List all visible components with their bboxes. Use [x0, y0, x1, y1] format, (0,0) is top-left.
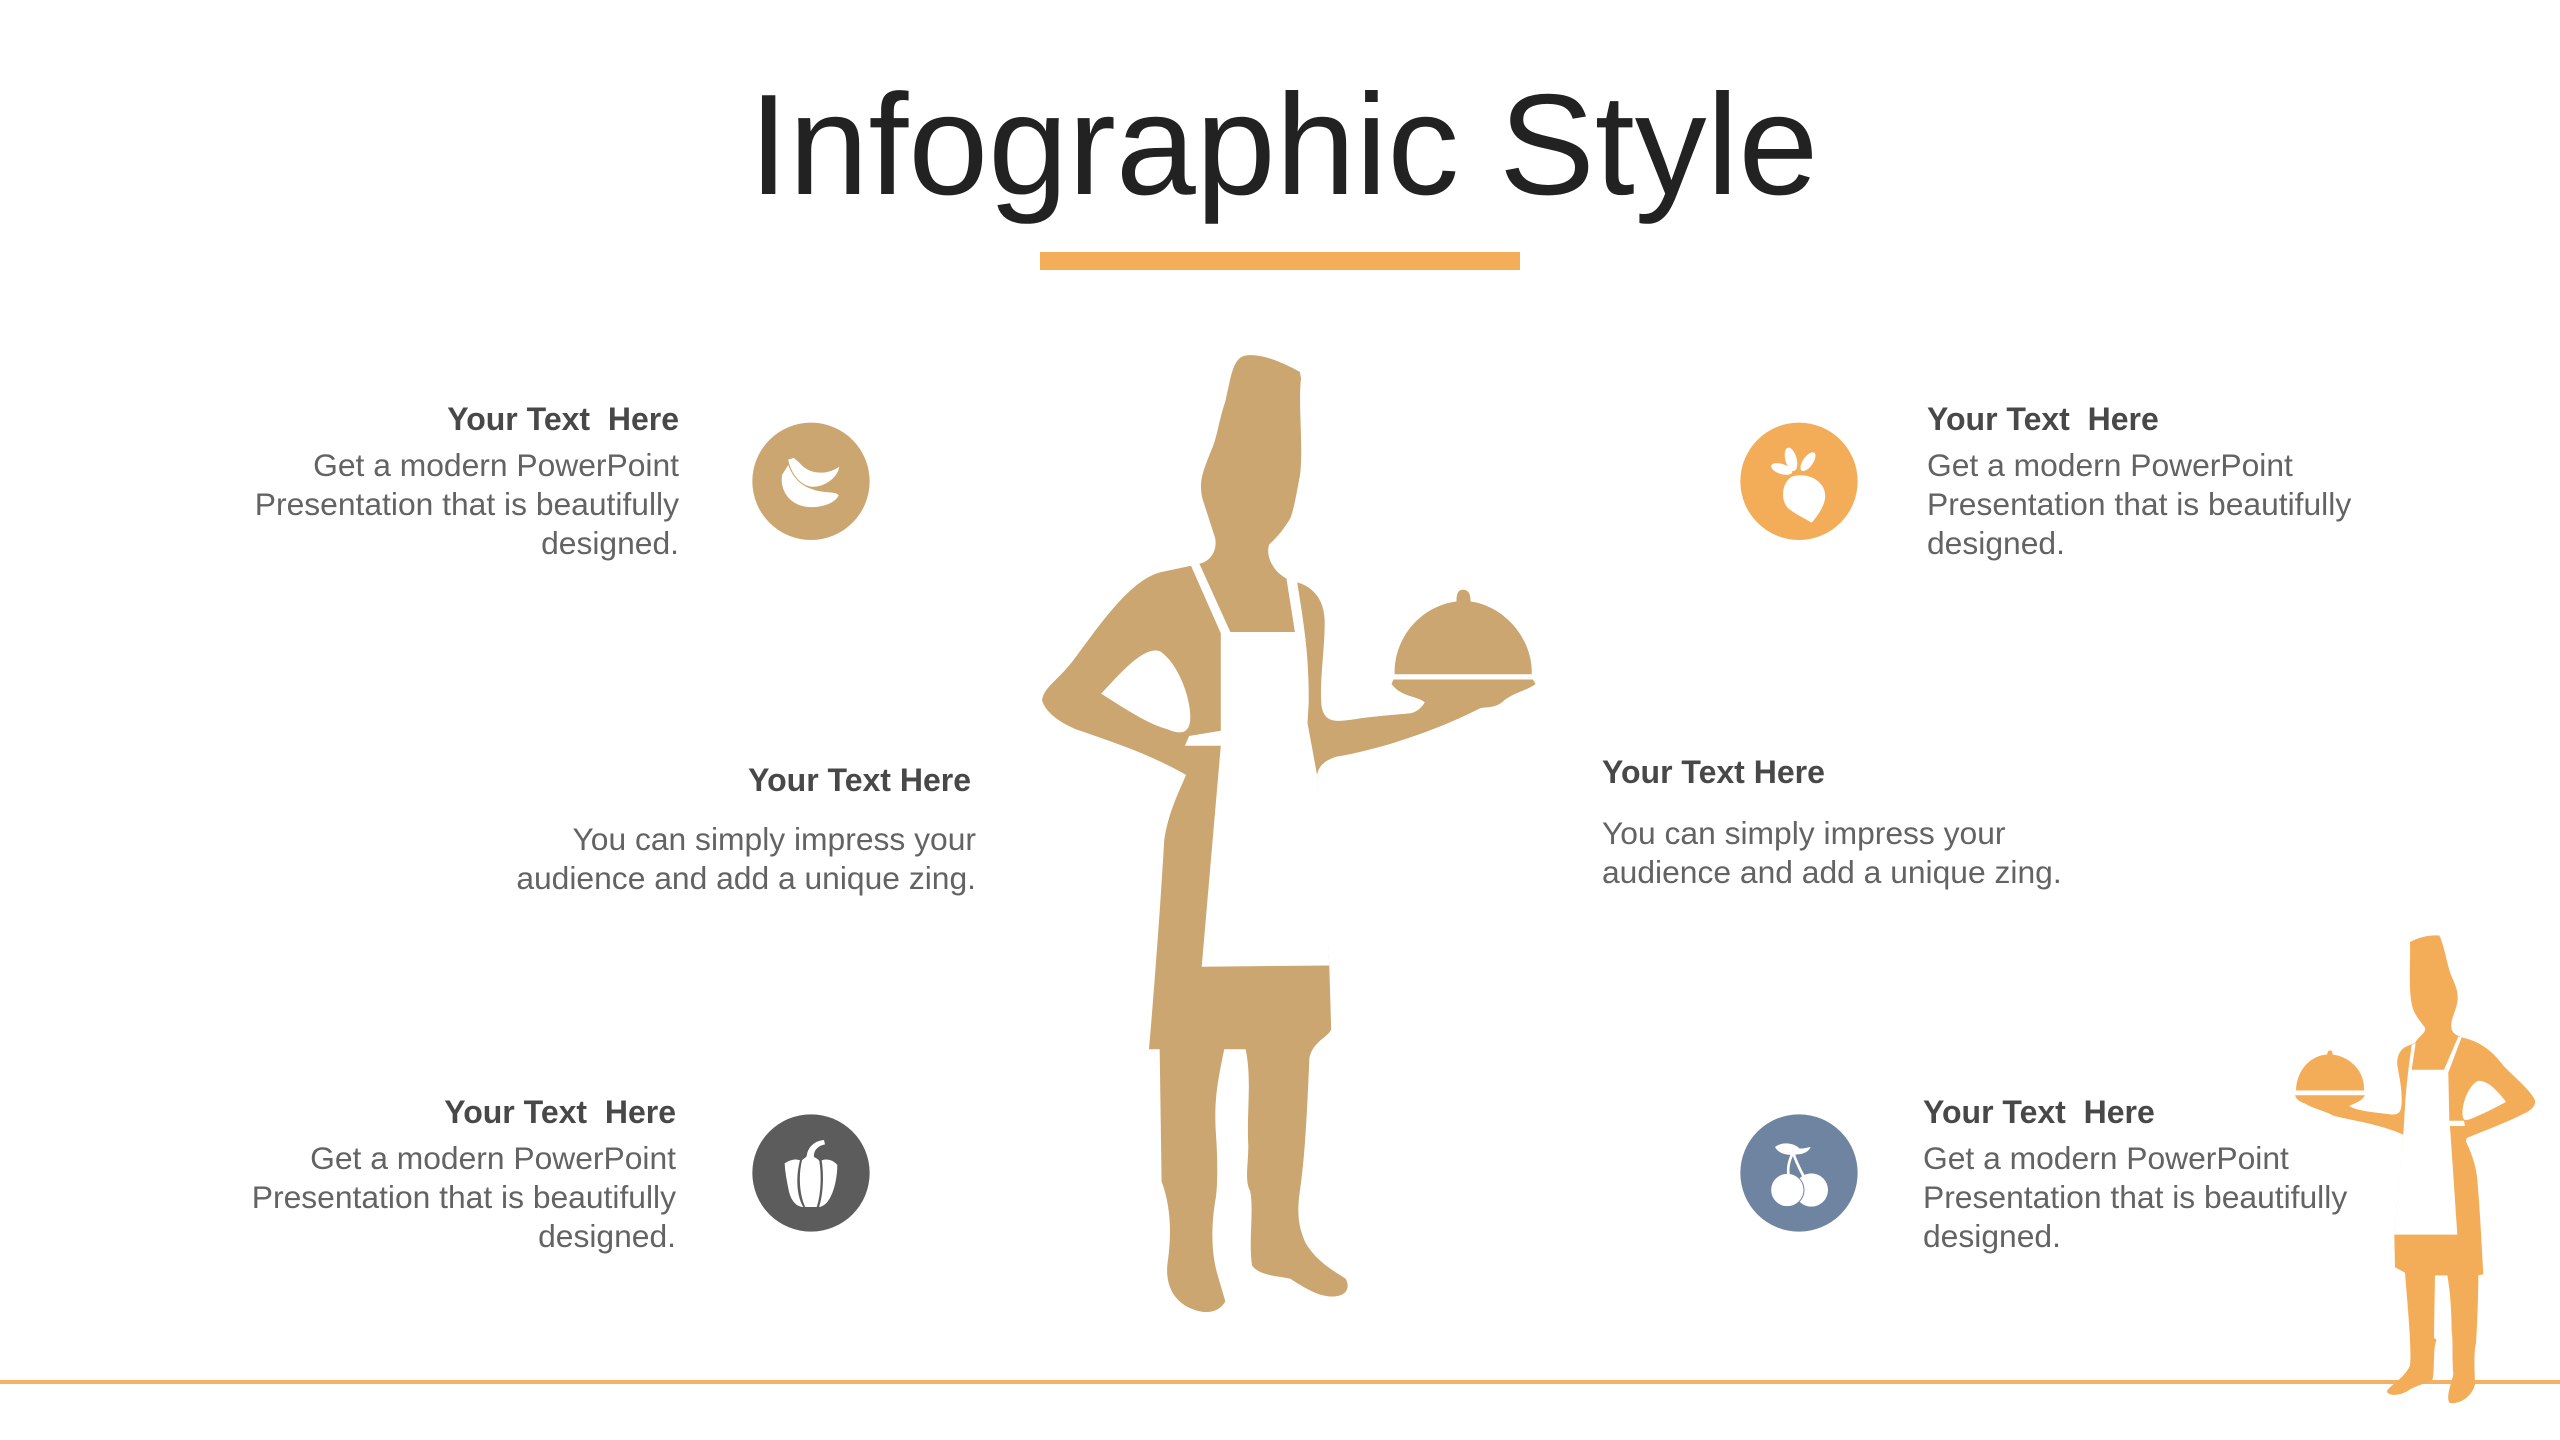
text block: top right: Get a modern PowerPoint	[1927, 447, 2293, 483]
text block: bottom left: Your Text Here	[444, 1094, 676, 1130]
text block: bottom left: Get a modern PowerPoint	[310, 1140, 676, 1176]
text block: top left	[255, 401, 679, 561]
icon: cherries	[1740, 1114, 1858, 1232]
icon: banana	[752, 423, 870, 540]
text block: top right: Presentation that is beautifully	[1927, 486, 2351, 522]
text block: bottom right: Your Text Here	[1923, 1094, 2155, 1130]
text block: top right: Your Text Here	[1927, 401, 2159, 437]
text block: middle left: Your Text Here	[748, 762, 971, 798]
text block: middle left: audience and add a unique zing.	[516, 860, 976, 896]
text block: bottom right: Presentation that is beautifully	[1923, 1179, 2347, 1215]
title underline	[1040, 252, 1520, 270]
text block: middle left: You can simply impress your	[572, 821, 976, 857]
text block: middle right	[1602, 754, 2062, 890]
text block: bottom right: designed.	[1923, 1218, 2061, 1254]
text block: middle right: Your Text Here	[1602, 754, 1825, 790]
text block: bottom right	[1923, 1094, 2348, 1254]
text block: middle right: You can simply impress your	[1602, 815, 2006, 851]
text block: top left: Your Text Here	[447, 401, 679, 437]
large chef silhouette	[1042, 355, 1536, 1312]
small orange chef silhouette	[2295, 935, 2535, 1403]
text block: middle left	[516, 762, 976, 896]
text block: top left: Get a modern PowerPoint	[313, 447, 679, 483]
text block: bottom left	[252, 1094, 676, 1254]
icon: turnip	[1740, 423, 1858, 540]
text block: middle right: audience and add a unique zing.	[1602, 854, 2062, 890]
text block: bottom left: designed.	[538, 1218, 676, 1254]
text block: top right: designed.	[1927, 525, 2065, 561]
text block: bottom right: Get a modern PowerPoint	[1923, 1140, 2289, 1176]
text block: top right	[1927, 401, 2352, 561]
title: Infographic Style	[749, 65, 1818, 225]
icon: bell pepper	[752, 1114, 870, 1232]
bottom rule	[0, 1380, 2560, 1384]
text block: top left: designed.	[541, 525, 679, 561]
text block: top left: Presentation that is beautifully	[255, 486, 679, 522]
text block: bottom left: Presentation that is beautifully	[252, 1179, 676, 1215]
